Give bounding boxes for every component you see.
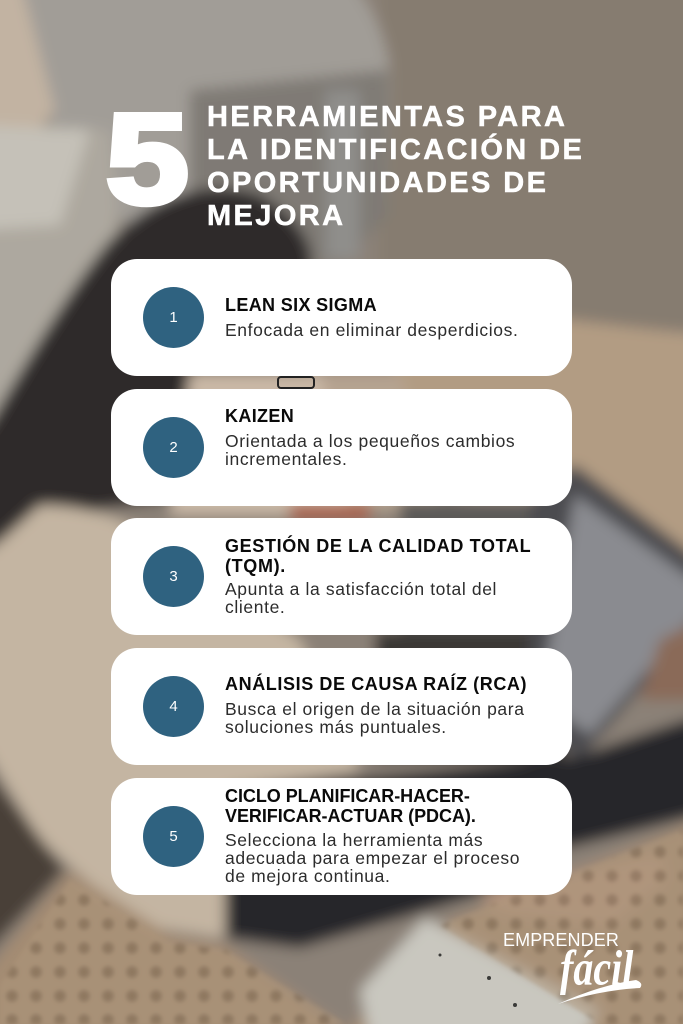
card 2 text: incrementales.	[225, 449, 347, 469]
card 3 text: Apunta a la satisfacción total del	[225, 579, 497, 599]
card 1 heading: LEAN SIX SIGMA	[225, 295, 377, 315]
logo swoosh	[558, 980, 642, 1004]
number badge 1: 1	[169, 309, 178, 326]
card 5 heading	[225, 786, 476, 826]
logo word Emprender: EMPRENDER	[503, 930, 619, 950]
card 5: PDCA	[111, 778, 572, 895]
number badge 4: 4	[169, 698, 178, 715]
title: HERRAMIENTAS PARA	[207, 101, 567, 133]
card 3 heading	[225, 535, 531, 576]
card 3 heading: (TQM).	[225, 556, 286, 576]
title	[207, 101, 584, 232]
title: MEJORA	[207, 200, 345, 232]
card 5 heading: VERIFICAR-ACTUAR (PDCA).	[225, 806, 476, 826]
number badge 4	[143, 676, 204, 737]
card 3 text	[225, 579, 497, 617]
card 4 text: soluciones más puntuales.	[225, 717, 447, 737]
number badge 1	[143, 287, 204, 348]
card 3 text: cliente.	[225, 597, 285, 617]
card 5 text: Selecciona la herramienta más	[225, 830, 483, 850]
logo script Fácil: fácil	[560, 940, 633, 996]
number badge 5: 5	[169, 828, 178, 845]
card 4 text: Busca el origen de la situación para	[225, 699, 525, 719]
logo	[503, 930, 642, 1004]
big number 5: 5	[106, 88, 189, 231]
number badge 2: 2	[169, 439, 178, 456]
card 2 heading: KAIZEN	[225, 406, 294, 426]
card 2: Kaizen	[111, 389, 572, 506]
title: OPORTUNIDADES DE	[207, 167, 548, 199]
card 1 text: Enfocada en eliminar desperdicios.	[225, 320, 518, 340]
card 5 text	[225, 830, 520, 886]
card 1: Lean Six Sigma	[111, 259, 572, 376]
card 5 text: adecuada para empezar el proceso	[225, 848, 520, 868]
card 5 text: de mejora continua.	[225, 866, 390, 886]
number badge 5	[143, 806, 204, 867]
card 2 text	[225, 431, 515, 469]
title: LA IDENTIFICACIÓN DE	[207, 134, 584, 166]
card 5 heading: CICLO PLANIFICAR-HACER-	[225, 786, 470, 806]
number badge 3: 3	[169, 568, 178, 585]
card 4 text	[225, 699, 525, 737]
glasses hint	[278, 377, 314, 388]
card 3 heading: GESTIÓN DE LA CALIDAD TOTAL	[225, 536, 531, 556]
card 3: TQM	[111, 518, 572, 635]
card 4: RCA	[111, 648, 572, 765]
number badge 2	[143, 417, 204, 478]
card 2 text: Orientada a los pequeños cambios	[225, 431, 515, 451]
card 4 heading: ANÁLISIS DE CAUSA RAÍZ (RCA)	[225, 674, 527, 694]
number badge 3	[143, 546, 204, 607]
